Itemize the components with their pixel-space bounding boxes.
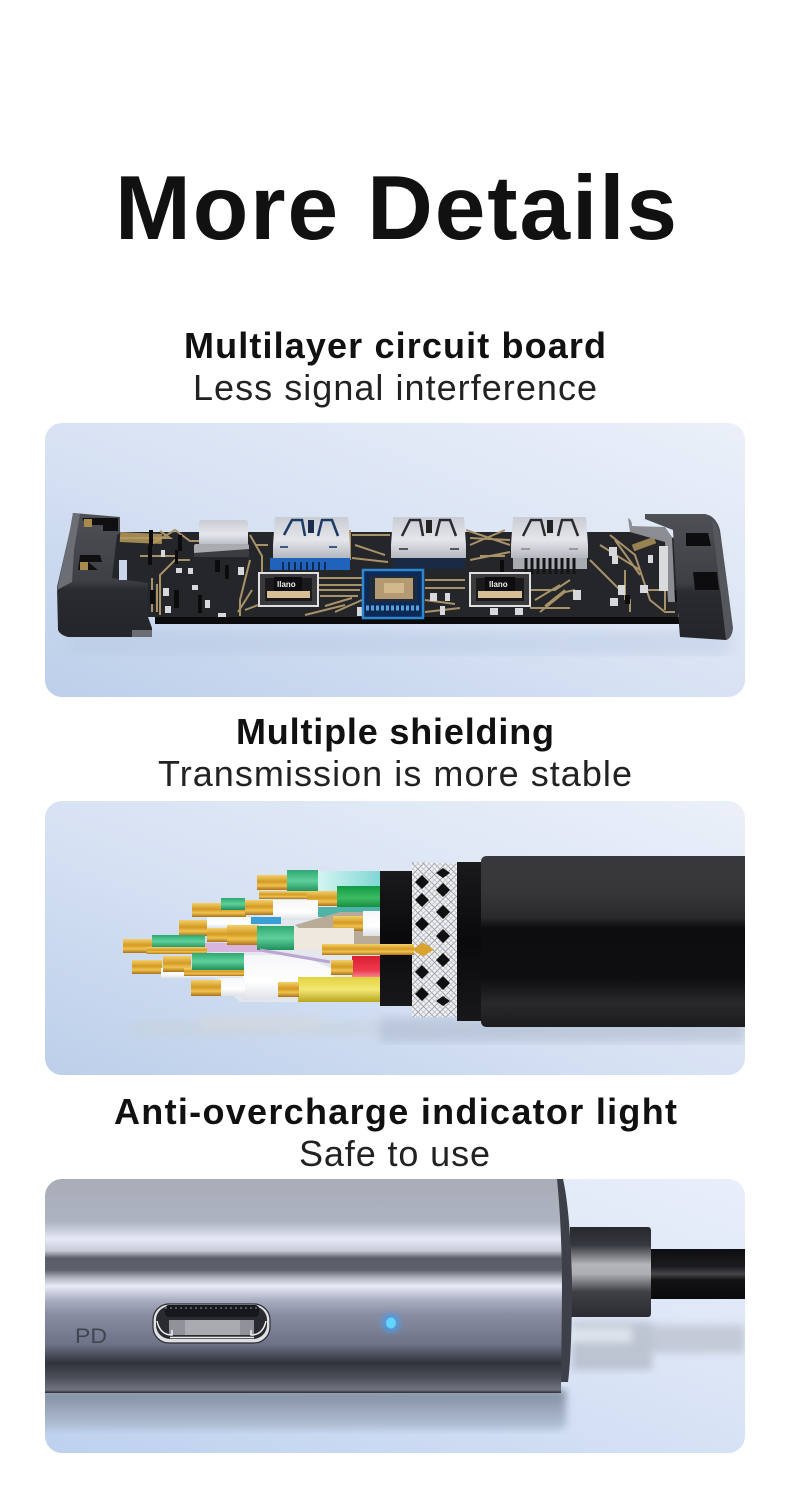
gold drain wire	[322, 942, 434, 956]
panel: circuit board	[45, 423, 745, 697]
braided shield	[412, 862, 460, 1017]
chip right	[470, 573, 530, 606]
hub body	[45, 1179, 562, 1393]
cable strain relief	[570, 1227, 651, 1317]
chip center blue	[363, 570, 423, 618]
USB-C port	[194, 520, 249, 557]
board shadow	[214, 632, 730, 654]
right bracket	[628, 514, 733, 640]
end cap	[557, 1179, 572, 1382]
cable	[650, 1249, 750, 1299]
heading: anti-overcharge indicator light: Anti-overcharge indicator light	[114, 1091, 677, 1132]
body shadow	[30, 1390, 566, 1430]
heading: multilayer circuit board	[184, 325, 606, 408]
heading: anti-overcharge indicator light: Safe to use	[299, 1133, 490, 1174]
outer black jacket	[481, 856, 745, 1027]
USB-A port 1	[270, 517, 350, 570]
PD label: PD	[75, 1325, 107, 1348]
heading: multiple shielding: Multiple shielding	[236, 711, 554, 752]
USB-A port 3	[511, 517, 588, 574]
panel: shielded cable	[45, 801, 745, 1075]
chip left: llano	[277, 580, 296, 589]
heading: multilayer circuit board: Multilayer circuit board	[184, 325, 606, 366]
heading: multiple shielding: Transmission is more stable	[158, 753, 632, 794]
inner black sleeve	[380, 871, 413, 1006]
heading: multiple shielding	[158, 711, 632, 794]
neck and cable reflection	[572, 1322, 745, 1370]
middle black jacket	[457, 862, 483, 1021]
heading: anti-overcharge indicator light	[114, 1091, 677, 1174]
chip right: llano	[489, 580, 508, 589]
left bracket	[57, 513, 152, 637]
cable reflection	[130, 1016, 745, 1042]
wires	[123, 870, 382, 1002]
chip left	[259, 573, 318, 606]
USB-C port	[153, 1304, 270, 1343]
panel: hub with indicator light	[30, 1179, 750, 1453]
indicator light	[381, 1313, 401, 1333]
heading: multilayer circuit board: Less signal interference	[193, 367, 597, 408]
title: More Details	[115, 158, 677, 259]
USB-A port 2	[391, 517, 466, 569]
circuit board body	[112, 530, 680, 624]
